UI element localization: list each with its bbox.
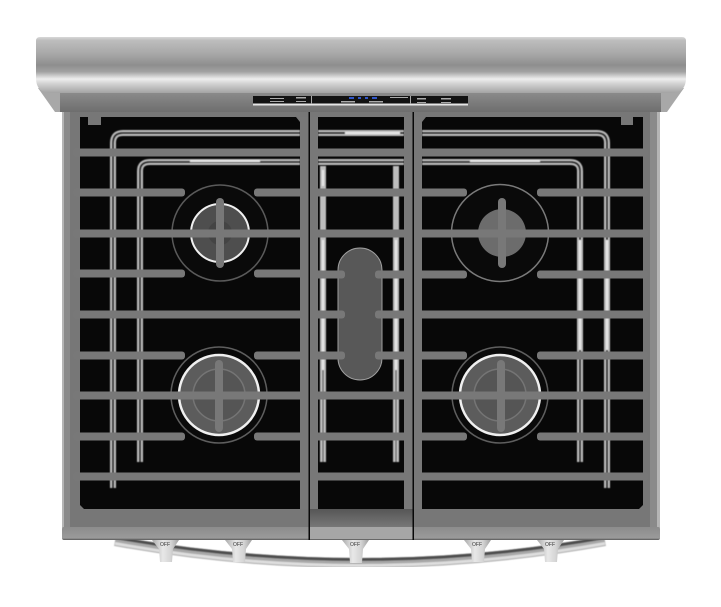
- tube bright highlights: [190, 133, 607, 370]
- center oval griddle burner: [338, 248, 382, 380]
- oven body frame: [62, 112, 660, 528]
- tube dark centers: [113, 133, 607, 488]
- black cooktop panels: [80, 112, 643, 540]
- stainless backguard hood: [36, 37, 686, 93]
- cast iron grates: [73, 117, 648, 509]
- tube dark gaps: [323, 370, 396, 462]
- front handle rail: [115, 538, 605, 566]
- burner: top right: [450, 183, 550, 283]
- control knobs: OFF: [160, 542, 170, 548]
- control knobs: [152, 540, 564, 563]
- center grate horizontal bars: [310, 148, 412, 480]
- control panel display: [253, 96, 468, 106]
- outer and inner tube bodies: [113, 133, 607, 488]
- control knobs: OFF: [472, 542, 482, 548]
- control knobs: OFF: [545, 542, 555, 548]
- front plate: [62, 509, 660, 540]
- grate vertical bars: [300, 117, 422, 509]
- left grate horizontal bars: [73, 148, 308, 480]
- wire burner tubes: [113, 133, 607, 488]
- burner: bottom left: [169, 345, 269, 445]
- burner: bottom right: [450, 345, 550, 445]
- control knobs: OFF: [233, 542, 243, 548]
- burner: top left: [170, 183, 270, 283]
- right grate horizontal bars: [415, 148, 648, 480]
- hood lower strip: [38, 88, 684, 112]
- control knobs: OFF: [350, 542, 360, 548]
